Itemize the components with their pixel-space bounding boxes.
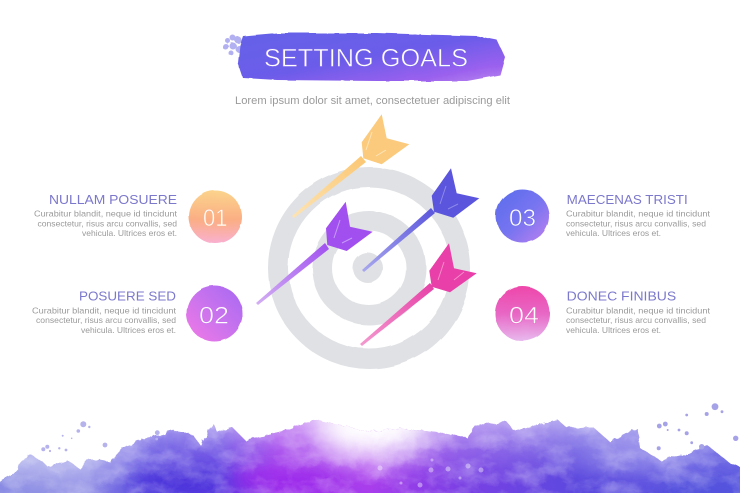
text 01: Curabitur blandit, neque id tincidunt	[34, 209, 178, 219]
badge 01	[189, 190, 242, 244]
title: SETTING GOALS	[264, 44, 468, 72]
text 01	[34, 209, 178, 238]
watercolor wash	[0, 420, 740, 493]
text 04: Curabitur blandit, neque id tincidunt	[566, 306, 711, 316]
subtitle: Lorem ipsum dolor sit amet, consectetuer adipiscing elit	[235, 95, 510, 107]
text 03	[566, 209, 711, 238]
heading 04: DONEC FINIBUS	[567, 289, 677, 304]
paint splatter: left	[41, 421, 160, 452]
text 02: consectetur, risus arcu convallis, sed	[36, 315, 176, 325]
text 02: vehicula. Ultrices eros et.	[81, 325, 176, 335]
item 04	[495, 286, 711, 341]
heading 02: POSUERE SED	[79, 289, 176, 304]
mottled texture	[0, 424, 740, 493]
banner brush stroke	[223, 33, 505, 81]
target rings	[278, 177, 460, 359]
arrow: blue	[362, 168, 479, 272]
text 03: consectetur, risus arcu convallis, sed	[566, 218, 706, 228]
heading 01: NULLAM POSUERE	[49, 192, 177, 207]
badge 04	[495, 286, 550, 341]
text 03: Curabitur blandit, neque id tincidunt	[566, 209, 711, 219]
paint splatter: light drops	[378, 458, 484, 488]
arrow: purple	[256, 202, 373, 305]
text 04: vehicula. Ultrices eros et.	[566, 325, 661, 335]
deep colour pools	[136, 464, 740, 493]
arrow: pink	[360, 243, 477, 346]
target illustration	[256, 114, 479, 359]
title banner	[223, 33, 505, 81]
text 03: vehicula. Ultrices eros et.	[566, 228, 661, 238]
badge 02: 02	[199, 302, 229, 330]
badge 04: 04	[509, 302, 539, 330]
text 01: consectetur, risus arcu convallis, sed	[38, 218, 177, 228]
item 02	[32, 286, 242, 342]
badge 03	[496, 190, 549, 242]
text 01: vehicula. Ultrices eros et.	[82, 228, 177, 238]
paint splatter: right	[657, 403, 738, 450]
badge 03: 03	[509, 205, 536, 232]
badge 01: 01	[203, 205, 228, 232]
light areas in the wash	[4, 420, 700, 490]
heading 03: MAECENAS TRISTI	[567, 192, 688, 207]
item 01	[34, 190, 242, 244]
text 02: Curabitur blandit, neque id tincidunt	[32, 306, 177, 316]
text 02	[32, 306, 177, 335]
badge 02	[186, 286, 242, 342]
item 03	[496, 190, 711, 242]
arrow: yellow	[292, 114, 409, 218]
text 04	[566, 306, 711, 335]
text 04: consectetur, risus arcu convallis, sed	[566, 315, 706, 325]
top lightening	[22, 420, 740, 476]
